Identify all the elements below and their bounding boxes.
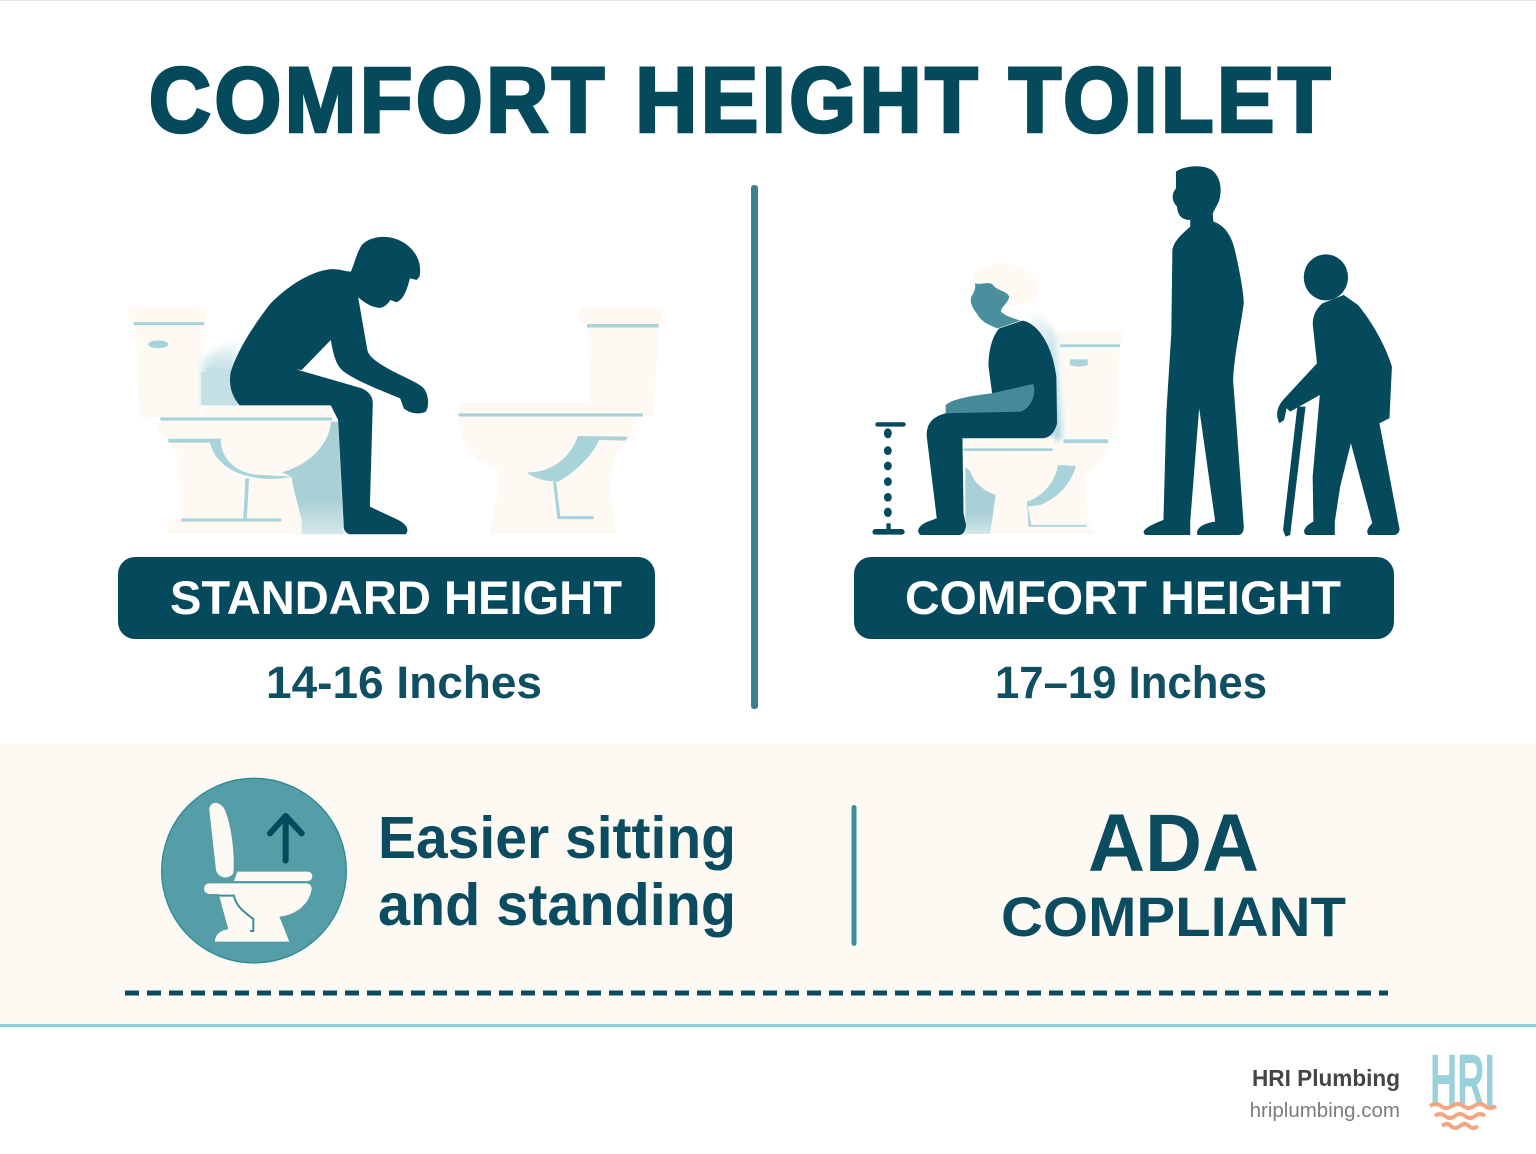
label: comfort height: COMFORT HEIGHT [905, 571, 1341, 624]
icon: seated elderly woman [918, 263, 1057, 535]
label: comfort height [854, 557, 1394, 639]
dashed rule [125, 990, 1388, 996]
icon: toilet with up arrow [162, 778, 346, 963]
footer: brand text: hriplumbing.com [1250, 1099, 1400, 1122]
panel: comfort height illustration [872, 166, 1400, 537]
title: COMFORT HEIGHT TOILET [149, 50, 1334, 152]
footer: brand text [1250, 1065, 1400, 1122]
text: 17-19 inches: 17–19 Inches [995, 657, 1267, 708]
footer: HRI logo [1430, 1039, 1496, 1128]
text: ADA compliant: ADA [1088, 798, 1259, 889]
center divider [751, 185, 758, 709]
text: ADA compliant: COMPLIANT [1001, 885, 1346, 948]
icon: elderly person with cane [1277, 254, 1400, 537]
label: standard height: STANDARD HEIGHT [170, 571, 622, 624]
divider [852, 805, 856, 946]
text: easier sitting and standing: Easier sitting [378, 805, 736, 871]
icon: toilet, right side [459, 308, 663, 534]
panel: benefits band [0, 744, 1536, 1027]
icon: height dimension marker [872, 422, 906, 535]
icon: toilet with seated person, left [128, 307, 344, 534]
text: ADA compliant [1001, 798, 1346, 948]
text: easier sitting and standing [378, 805, 736, 938]
footer: brand text: HRI Plumbing [1252, 1065, 1400, 1091]
text: 14-16 inches: 14-16 Inches [266, 657, 542, 708]
icon: seated man silhouette [230, 237, 428, 534]
panel: standard height illustration [128, 237, 663, 534]
icon: toilet [962, 310, 1122, 534]
icon: standing man silhouette [1144, 166, 1244, 535]
label: standard height [118, 557, 655, 639]
text: easier sitting and standing: and standing [378, 872, 736, 938]
